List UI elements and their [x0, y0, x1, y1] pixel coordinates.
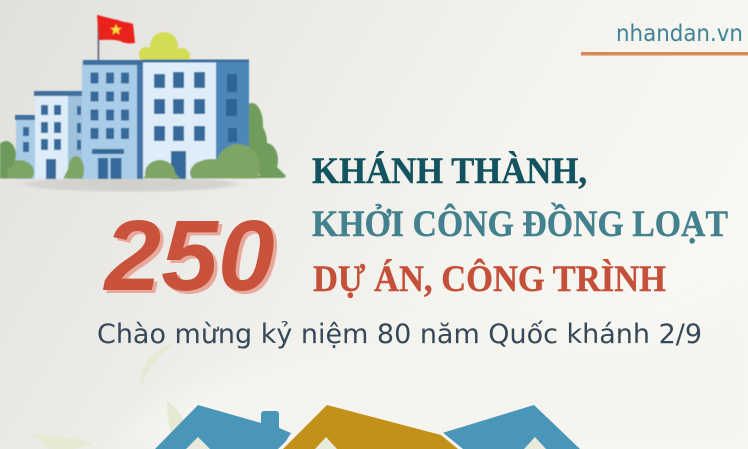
yellow-green bush behind roof	[139, 32, 190, 62]
subtitle: Chào mừng kỷ niệm 80 năm Quốc khánh 2/9	[97, 319, 702, 350]
decorative leaves	[31, 342, 187, 449]
back bushes right	[248, 102, 286, 179]
big number: 250: 250	[106, 203, 278, 315]
main right building	[143, 61, 217, 179]
main middle building	[82, 62, 138, 179]
big number: 250: 250	[102, 200, 274, 312]
right blue roof	[439, 405, 580, 449]
foreground bushes	[0, 140, 260, 180]
orange roof	[283, 405, 458, 449]
second building	[35, 92, 83, 179]
left blue roof	[155, 405, 291, 449]
heading	[312, 150, 728, 300]
orange roof outline	[278, 402, 463, 449]
gable cutouts	[186, 437, 210, 449]
illustration: house roofs	[155, 402, 580, 449]
illustration: building with flag	[0, 15, 286, 193]
flag	[97, 15, 135, 61]
heading line 1: KHÁNH THÀNH,	[312, 150, 587, 192]
ground shadow	[8, 175, 252, 193]
logo: nhandan.vn	[581, 21, 748, 56]
heading line 3: DỰ ÁN, CÔNG TRÌNH	[313, 257, 666, 300]
small building left	[16, 116, 37, 179]
